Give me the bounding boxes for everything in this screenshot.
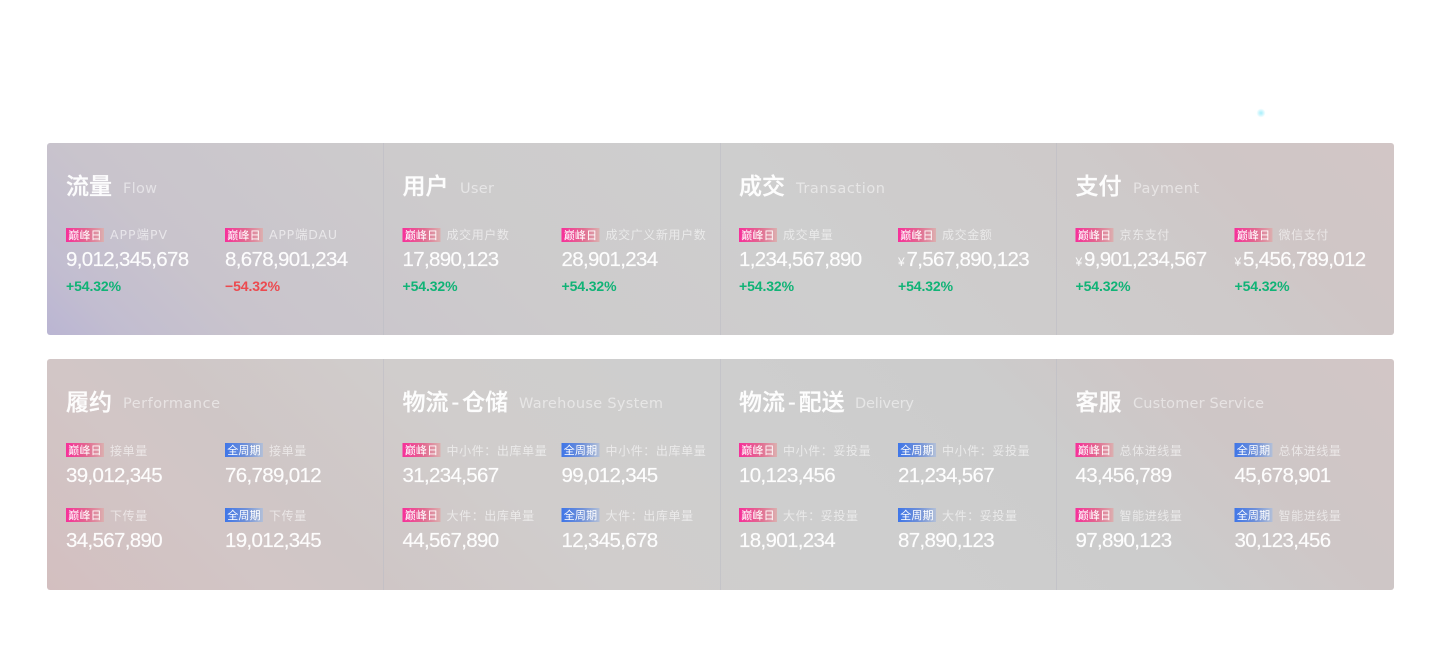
metric: 全周期 中小件出库单量: 99,012,345	[562, 464, 658, 487]
metric: 成交用户数: 巅峰日	[405, 229, 438, 242]
metric: 全周期 下传量: 下传量	[269, 508, 307, 523]
metric: 京东支付: +54.32%	[1076, 278, 1131, 294]
panel: Customer Service	[1076, 389, 1342, 552]
metric: 巅峰日 中小件妥投量	[739, 443, 871, 487]
metric: 成交广义新用户数: 成交广义新用户数	[606, 227, 706, 242]
panel: Delivery	[739, 389, 1030, 552]
metric: 巅峰日 大件妥投量	[739, 508, 859, 552]
metric: 全周期 大件出库单量	[562, 508, 694, 552]
metric: 巅峰日 下传量: 巅峰日	[68, 509, 102, 522]
metric: 成交单量: 巅峰日	[741, 229, 775, 242]
metric: APP端DAU: 8,678,901,234	[225, 248, 348, 271]
heading: 流量 Flow	[66, 173, 157, 199]
panel: Transaction	[739, 173, 1029, 294]
metric: 巅峰日 大件妥投量: 大件：妥投量	[783, 508, 859, 523]
metric: 巅峰日 智能进线量: 巅峰日	[1078, 509, 1111, 522]
metric: 巅峰日 接单量: 接单量	[110, 443, 148, 458]
metric: 成交广义新用户数	[562, 227, 706, 294]
metric: 巅峰日 中小件妥投量: 中小件：妥投量	[783, 443, 871, 458]
heading: 物流-仓储 Warehouse System	[402, 389, 663, 415]
heading: 物流-配送 Delivery	[739, 389, 914, 415]
metric: 成交金额: ¥	[897, 255, 905, 269]
metric: 巅峰日 大件妥投量: 18,901,234	[739, 529, 835, 552]
metric: 巅峰日 总体进线量: 巅峰日	[1078, 444, 1111, 457]
heading: 支付 Payment: Payment	[1133, 181, 1199, 197]
metric: 巅峰日 大件出库单量: 巅峰日	[405, 509, 438, 522]
metric: 巅峰日 中小件出库单量	[402, 443, 547, 487]
metric: 成交金额: +54.32%	[898, 278, 954, 294]
metric: 全周期 中小件出库单量: 中小件：出库单量	[606, 443, 706, 458]
metric: 巅峰日 大件出库单量: 大件：出库单量	[446, 508, 535, 523]
metric: 京东支付: 巅峰日	[1078, 229, 1111, 242]
metric: 微信支付: 5,456,789,012	[1243, 248, 1366, 271]
metric: 全周期 大件妥投量: 87,890,123	[898, 529, 994, 552]
metric: 全周期 智能进线量	[1234, 508, 1342, 552]
heading: 成交 Transaction: Transaction	[795, 181, 885, 197]
heading: 支付 Payment	[1076, 173, 1199, 199]
metric: 成交金额: 成交金额	[942, 227, 992, 242]
metric: 全周期 总体进线量: 全周期	[1237, 443, 1270, 457]
metric: 全周期 总体进线量: 总体进线量	[1278, 444, 1342, 458]
metric: 全周期 中小件妥投量: 全周期	[900, 443, 934, 457]
metric: APP端DAU	[225, 227, 348, 294]
metric: 成交单量: +54.32%	[739, 278, 795, 294]
metric: 微信支付: ¥	[1234, 255, 1242, 269]
heading: 履约 Performance: 履约	[66, 389, 112, 415]
metric: 全周期 下传量: 19,012,345	[225, 529, 321, 552]
metric: 成交用户数: 成交用户数	[446, 227, 510, 242]
metric: 全周期 大件出库单量: 全周期	[564, 508, 597, 522]
metric: 京东支付: 9,901,234,567	[1084, 248, 1207, 271]
metric: 巅峰日 大件出库单量	[402, 508, 535, 552]
metric: 全周期 总体进线量: 45,678,901	[1234, 464, 1331, 487]
metric: 全周期 大件出库单量: 12,345,678	[562, 529, 658, 552]
metric: 成交用户数	[402, 227, 510, 294]
metric: 全周期 中小件出库单量: 全周期	[564, 443, 597, 457]
panel: Payment	[1074, 173, 1366, 294]
heading: 履约 Performance	[66, 389, 220, 415]
heading: 客服 Customer Service: Customer Service	[1133, 396, 1264, 412]
panel: bottom row background	[47, 359, 1394, 590]
metric: APP端DAU: APP端DAU	[269, 227, 337, 242]
heading: 流量 Flow: Flow	[123, 181, 157, 197]
metric: 成交单量: 1,234,567,890	[739, 248, 862, 271]
metric: 巅峰日 中小件出库单量: 巅峰日	[405, 444, 438, 457]
heading: 支付 Payment: 支付	[1076, 173, 1122, 199]
metric: 巅峰日 总体进线量	[1076, 443, 1183, 487]
metric: 全周期 中小件妥投量	[898, 443, 1030, 487]
metric: 巅峰日 智能进线量: 97,890,123	[1076, 529, 1172, 552]
metric: APP端DAU: 巅峰日	[227, 229, 261, 242]
metric: 全周期 大件妥投量: 大件：妥投量	[942, 508, 1018, 523]
metric: 微信支付: 巅峰日	[1237, 229, 1270, 242]
metric: 巅峰日 中小件出库单量: 中小件：出库单量	[446, 443, 547, 458]
metric: 成交单量: 成交单量	[783, 227, 833, 242]
heading: 物流-仓储 Warehouse System: Warehouse System	[519, 396, 663, 412]
metric: 成交用户数: +54.32%	[402, 278, 458, 294]
metric: 巅峰日 中小件出库单量: 31,234,567	[402, 464, 499, 487]
metric: 全周期 接单量: 全周期	[227, 443, 261, 457]
metric: APP端PV: 巅峰日	[68, 229, 102, 242]
panel: top row background	[47, 143, 1394, 335]
metric: 全周期 大件妥投量: 全周期	[900, 508, 934, 522]
heading: 用户 User: 用户	[402, 173, 448, 199]
panel: Performance	[66, 389, 321, 552]
metric: 全周期 中小件妥投量: 21,234,567	[898, 464, 994, 487]
metric: APP端PV: +54.32%	[66, 278, 122, 294]
panel: User	[402, 173, 706, 294]
metric: 微信支付	[1234, 228, 1366, 294]
heading: 客服 Customer Service: 客服	[1076, 389, 1122, 415]
metric: 全周期 下传量	[225, 508, 321, 552]
metric: 成交广义新用户数: +54.32%	[562, 278, 617, 294]
metric: 巅峰日 接单量: 39,012,345	[66, 464, 162, 487]
heading: 客服 Customer Service	[1076, 389, 1264, 415]
metric: 巅峰日 智能进线量: 智能进线量	[1120, 508, 1183, 523]
metric: 全周期 接单量: 76,789,012	[225, 464, 321, 487]
metric: 巅峰日 接单量	[66, 443, 162, 487]
metric: 巅峰日 总体进线量: 43,456,789	[1076, 464, 1172, 487]
metric: 巅峰日 中小件妥投量: 巅峰日	[741, 444, 775, 457]
heading: 物流-配送 Delivery: 物流-配送	[739, 389, 845, 415]
metric: 全周期 智能进线量: 30,123,456	[1234, 529, 1331, 552]
heading: 履约 Performance: Performance	[123, 396, 220, 412]
metric: 成交金额: 7,567,890,123	[906, 248, 1029, 271]
metric: 成交广义新用户数: 巅峰日	[564, 229, 597, 242]
heading: 用户 User	[402, 173, 494, 199]
metric: 全周期 智能进线量: 智能进线量	[1278, 508, 1342, 523]
metric: 巅峰日 下传量: 34,567,890	[66, 529, 162, 552]
metric: 全周期 接单量: 接单量	[269, 443, 307, 458]
metric: 全周期 智能进线量: 全周期	[1237, 508, 1270, 522]
metric: 巅峰日 中小件妥投量: 10,123,456	[739, 464, 835, 487]
metric: 巅峰日 总体进线量: 总体进线量	[1120, 444, 1183, 458]
metric: 全周期 大件出库单量: 大件：出库单量	[606, 508, 694, 523]
metric: 巅峰日 大件妥投量: 巅峰日	[741, 509, 775, 522]
metric: 巅峰日 大件出库单量: 44,567,890	[402, 529, 499, 552]
metric: 成交广义新用户数: 28,901,234	[562, 248, 658, 271]
metric: 全周期 中小件出库单量	[562, 443, 706, 487]
panel: Flow	[66, 173, 348, 294]
icon: cyan glow dot	[1256, 108, 1266, 118]
metric: 巅峰日 下传量	[66, 508, 162, 552]
metric: 全周期 总体进线量	[1234, 443, 1342, 487]
metric: 京东支付: 京东支付	[1120, 228, 1170, 242]
metric: 京东支付	[1074, 228, 1207, 294]
metric: 全周期 大件妥投量	[898, 508, 1018, 552]
metric: 全周期 接单量	[225, 443, 321, 487]
metric: 成交单量	[739, 227, 862, 294]
metric: APP端PV	[66, 227, 189, 294]
metric: 成交金额	[897, 227, 1029, 294]
metric: 成交用户数: 17,890,123	[402, 248, 499, 271]
metric: APP端PV: APP端PV	[110, 227, 167, 242]
metric: 成交金额: 巅峰日	[900, 229, 934, 242]
metric: 京东支付: ¥	[1074, 255, 1082, 269]
heading: 成交 Transaction: 成交	[739, 173, 785, 199]
heading: 物流-配送 Delivery: Delivery	[855, 396, 914, 412]
metric: 巅峰日 接单量: 巅峰日	[68, 444, 102, 457]
metric: APP端DAU: −54.32%	[225, 278, 281, 294]
heading: 物流-仓储 Warehouse System: 物流-仓储	[402, 389, 508, 415]
metric: 巅峰日 下传量: 下传量	[110, 508, 148, 523]
heading: 流量 Flow: 流量	[66, 173, 112, 199]
heading: 用户 User: User	[460, 181, 494, 197]
metric: 巅峰日 智能进线量	[1076, 508, 1183, 552]
metric: 全周期 下传量: 全周期	[227, 508, 261, 522]
metric: 全周期 中小件妥投量: 中小件：妥投量	[942, 443, 1030, 458]
metric: 微信支付: 微信支付	[1278, 228, 1329, 242]
metric: 微信支付: +54.32%	[1234, 278, 1290, 294]
panel: Warehouse System	[402, 389, 706, 552]
metric: APP端PV: 9,012,345,678	[66, 248, 189, 271]
heading: 成交 Transaction	[739, 173, 885, 199]
